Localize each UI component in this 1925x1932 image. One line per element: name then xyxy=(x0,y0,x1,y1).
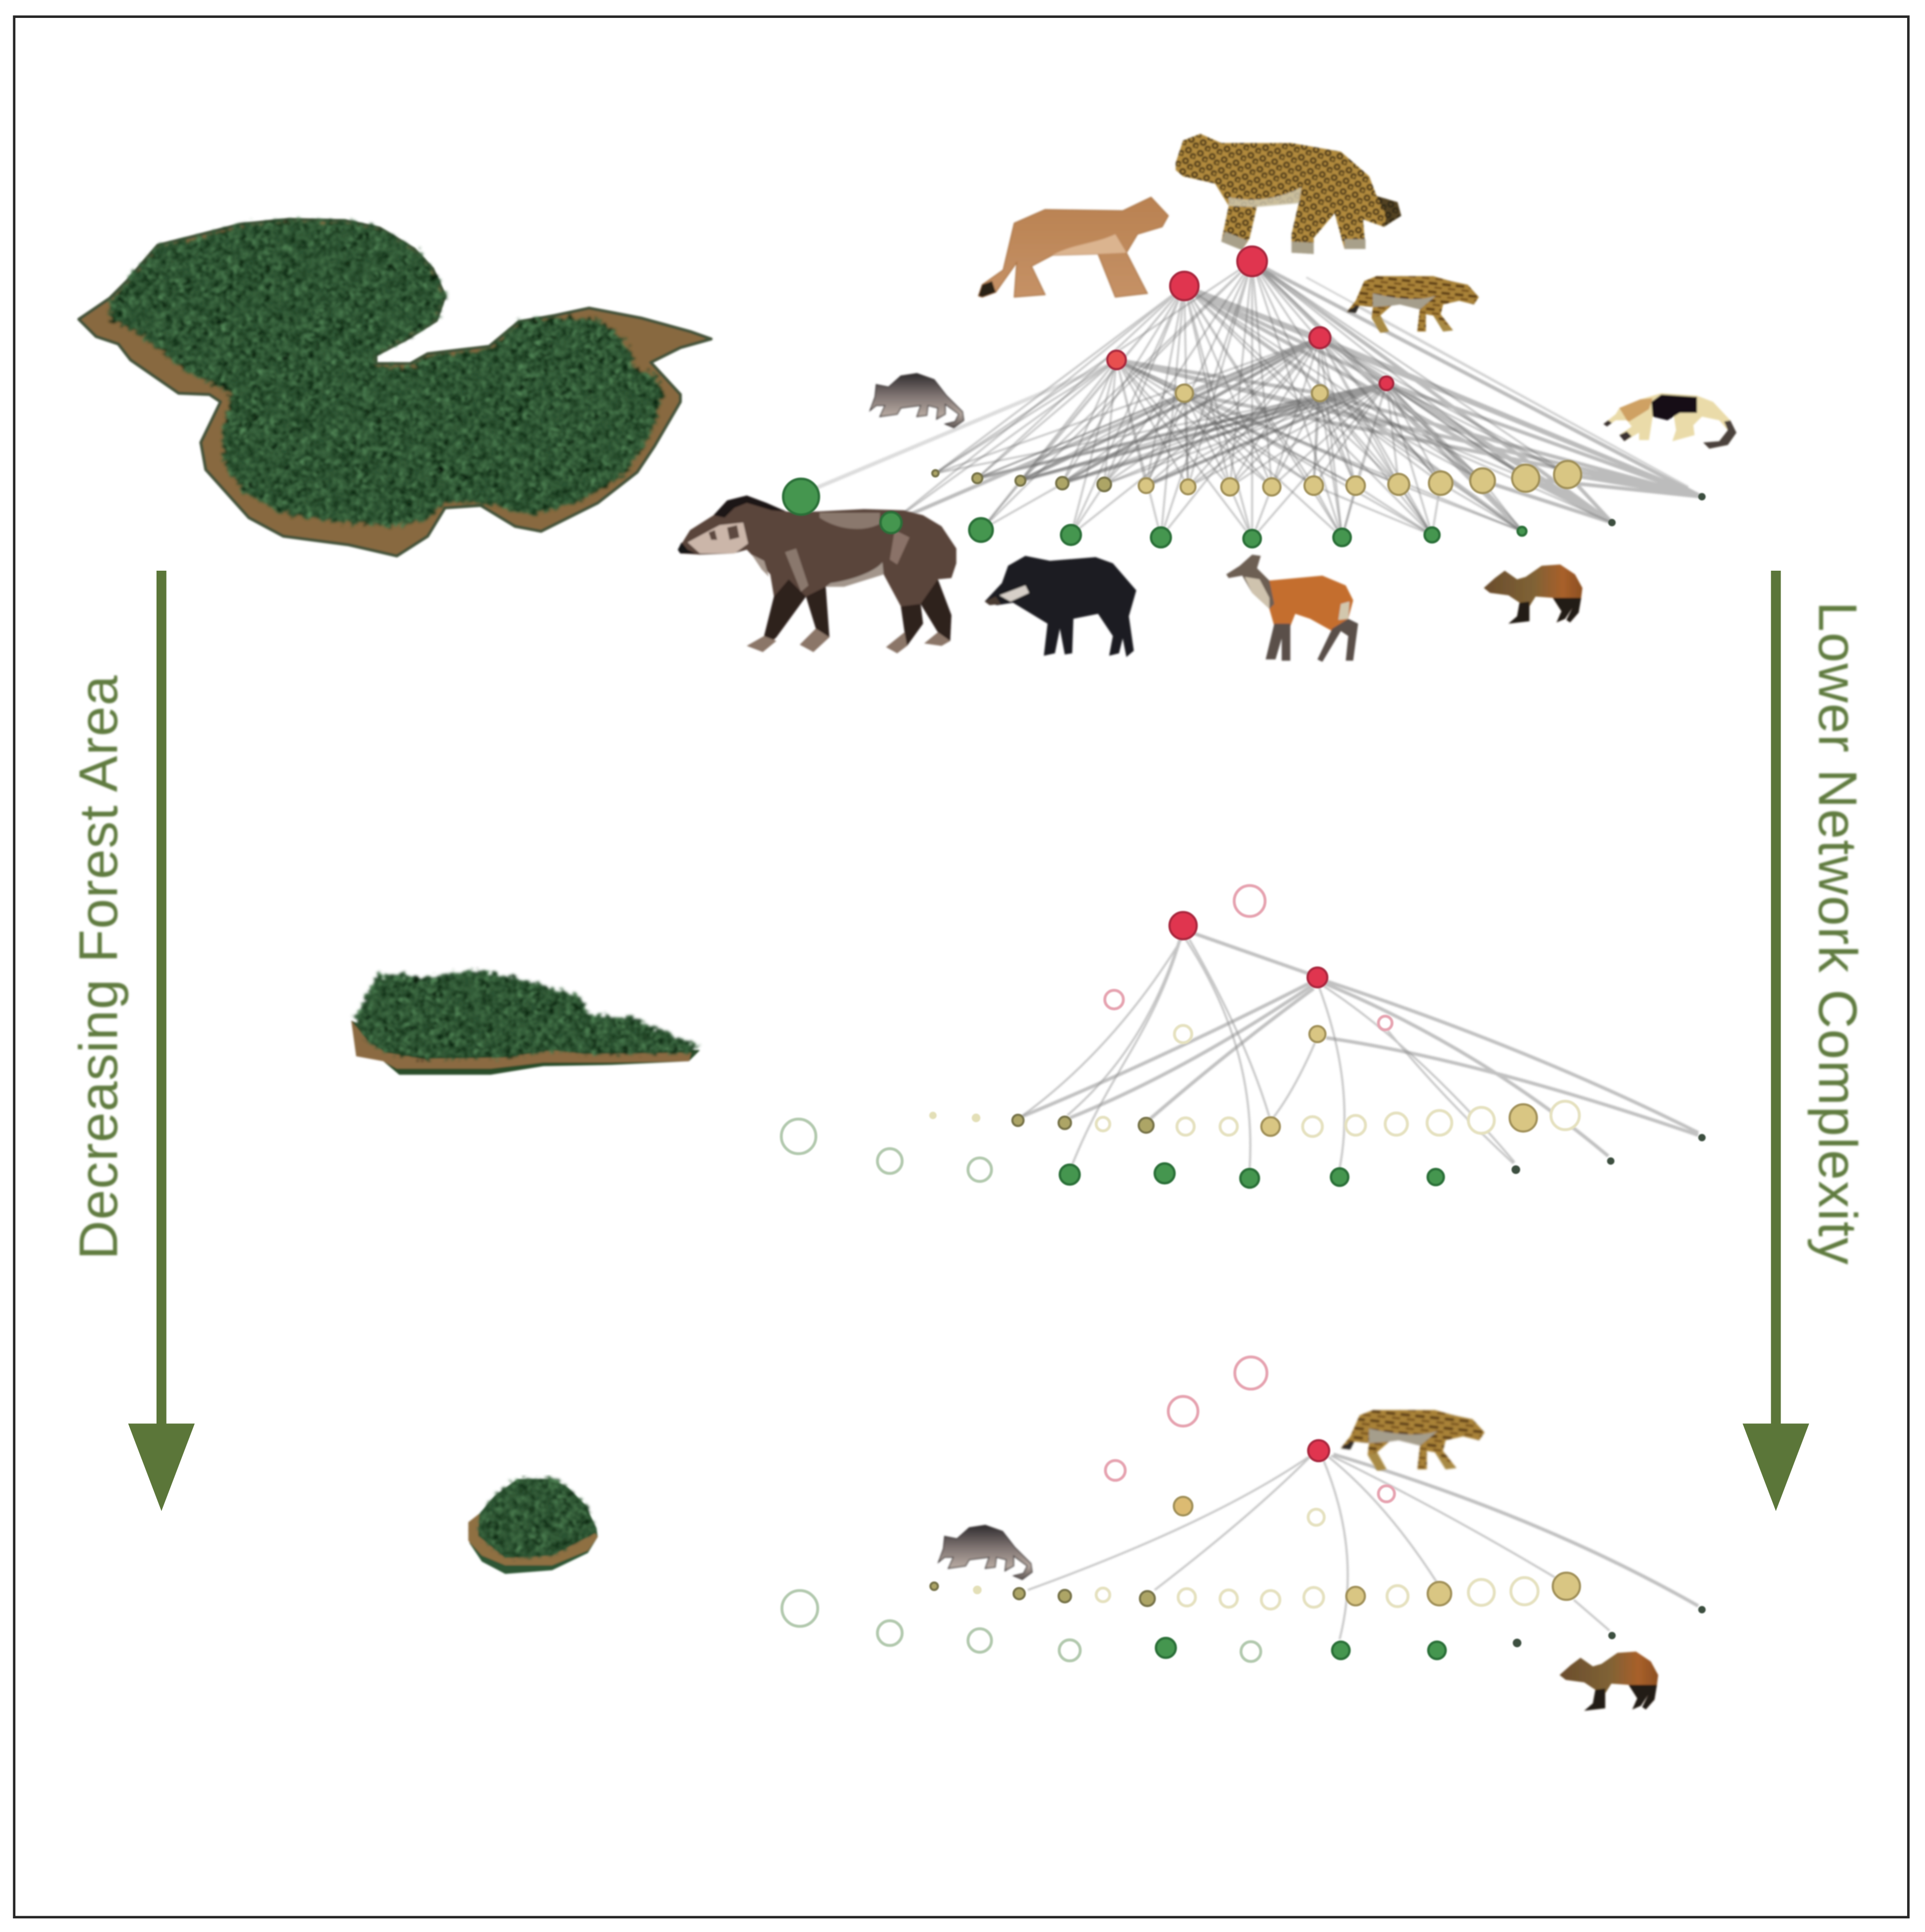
network 2: reduced food web edges xyxy=(1022,933,1698,1168)
network 2: mesopredator nodes xyxy=(1175,1026,1325,1043)
network 1: omnivore row xyxy=(932,461,1581,495)
network 3: nodes xyxy=(782,1357,1706,1662)
network 2: nodes xyxy=(781,885,1706,1187)
animal: armadillo top xyxy=(870,374,964,428)
network 2: omnivore row xyxy=(929,1101,1579,1136)
network 2: predator nodes xyxy=(1105,885,1392,1030)
network 3: mesopredator nodes xyxy=(1174,1497,1324,1525)
animal: agouti top xyxy=(1484,564,1582,623)
network 3: reduced food web edges xyxy=(1028,1455,1698,1639)
animal: jaguar xyxy=(1176,134,1401,254)
network 3: herbivore row xyxy=(782,1591,1706,1662)
animal: puma xyxy=(979,197,1168,297)
network 1: mesopredator nodes xyxy=(1176,385,1328,402)
animal: agouti bottom xyxy=(1560,1652,1658,1711)
animal: tapir xyxy=(678,495,956,653)
animal: deer xyxy=(1226,554,1358,662)
animal: ocelot top xyxy=(1347,276,1479,333)
arrow: lower network complexity xyxy=(1743,571,1809,1511)
network 1: nodes xyxy=(783,247,1706,547)
network 1: predator nodes xyxy=(1107,247,1393,390)
forest patch: large xyxy=(79,219,711,556)
forest patch: small xyxy=(468,1479,598,1574)
animal: ocelot bottom xyxy=(1341,1410,1484,1471)
animal: anteater xyxy=(1604,393,1736,448)
arrow: decreasing forest area xyxy=(128,571,195,1511)
animal: armadillo bottom xyxy=(939,1525,1032,1579)
network 3: predator nodes xyxy=(1106,1357,1394,1502)
label: decreasing forest area: Decreasing Forest Area xyxy=(68,675,129,1260)
forest patch: medium xyxy=(351,970,700,1075)
network 1: full food web edges xyxy=(816,261,1702,539)
network 3: omnivore row xyxy=(931,1573,1580,1609)
network 1: herbivore row xyxy=(783,479,1706,547)
network 2: herbivore row xyxy=(781,1119,1706,1187)
label: lower network complexity: Lower Network Complexity xyxy=(1807,601,1868,1265)
animal: peccary xyxy=(985,556,1136,657)
